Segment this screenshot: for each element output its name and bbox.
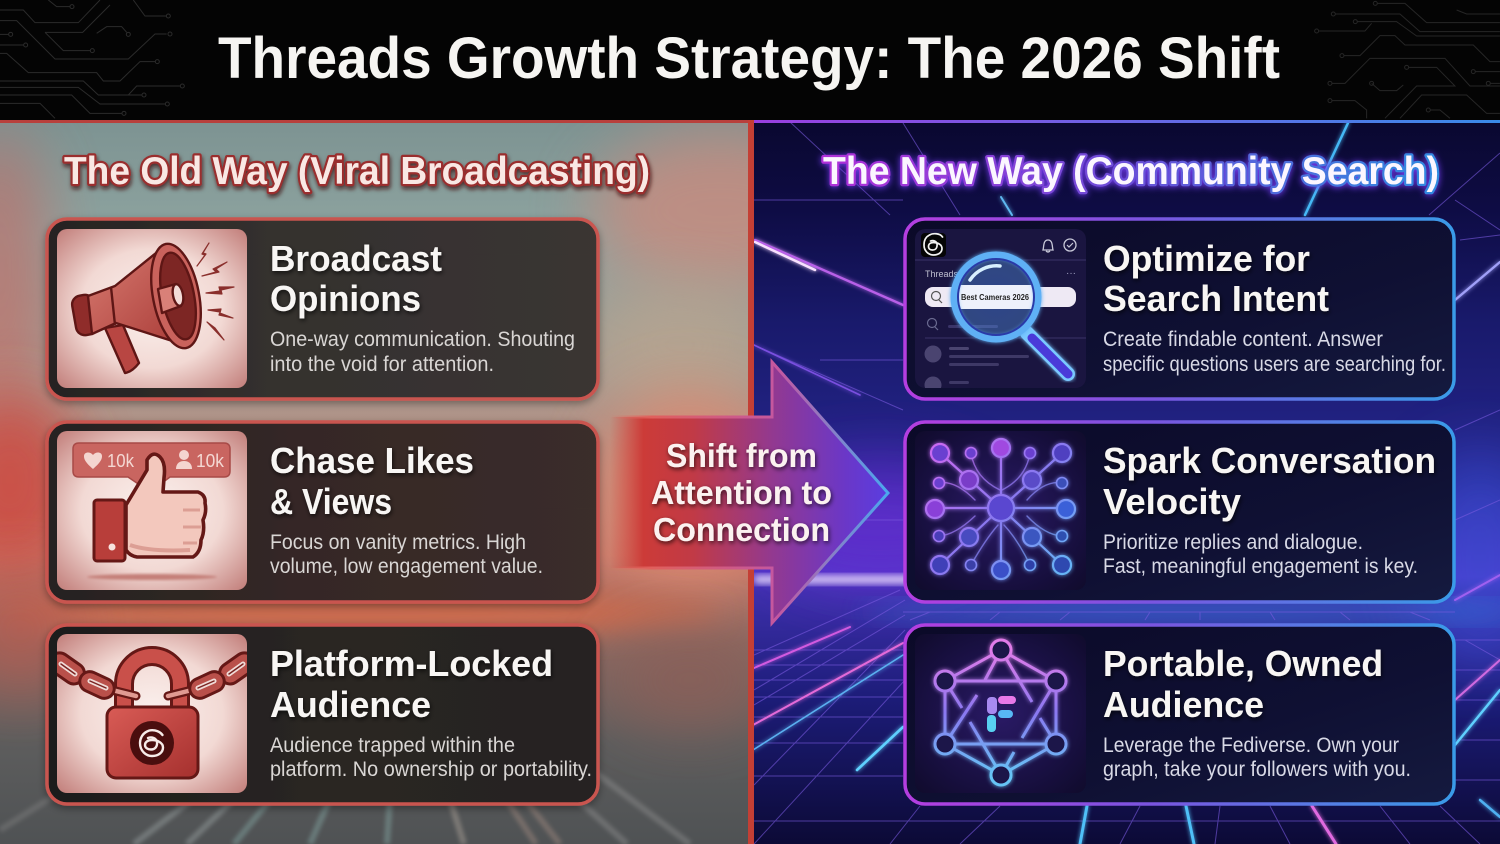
icon: thumbs up with metrics: 10k: [196, 451, 225, 471]
card description: Prioritize replies and dialogue.: [1103, 531, 1363, 554]
card description: [270, 531, 543, 578]
heading: old way: The Old Way (Viral Broadcasting): [64, 150, 650, 193]
card heading: & Views: [270, 481, 392, 522]
card heading: Platform-Locked: [270, 643, 553, 684]
icon: search interface with magnifier: ···: [1066, 268, 1076, 279]
icon: fediverse graph: [915, 634, 1086, 793]
card description: volume, low engagement value.: [270, 555, 543, 578]
header band: [0, 0, 1500, 120]
arrow label: Shift from: [666, 437, 817, 474]
card heading: Audience: [1103, 684, 1264, 725]
card: optimize for search intent: [905, 219, 1454, 399]
arrow label: [651, 437, 832, 548]
card: broadcast opinions: [47, 219, 598, 399]
card: chase likes and views: [47, 422, 598, 602]
card description: Audience trapped within the: [270, 734, 515, 757]
card description: [270, 734, 592, 781]
card heading: Chase Likes: [270, 440, 474, 481]
card heading: Spark Conversation: [1103, 440, 1436, 481]
arrow label: Attention to: [651, 474, 832, 511]
card heading: Optimize for: [1103, 238, 1310, 279]
card description: platform. No ownership or portability.: [270, 758, 592, 781]
icon: thumbs up with metrics: 10k: [107, 451, 135, 471]
divider: top accent old: [0, 120, 752, 123]
card heading: [270, 238, 442, 319]
card heading: Search Intent: [1103, 278, 1329, 319]
divider: center: [748, 120, 754, 844]
card description: into the void for attention.: [270, 353, 494, 376]
card description: One-way communication. Shouting: [270, 328, 575, 351]
card heading: Audience: [270, 684, 431, 725]
card description: Focus on vanity metrics. High: [270, 531, 526, 554]
icon: search interface with magnifier: Threads: [925, 269, 959, 279]
card heading: [270, 440, 474, 522]
icon: search interface with magnifier: [915, 229, 1086, 394]
card heading: [1103, 643, 1383, 725]
card description: [1103, 531, 1418, 578]
icon: padlock and chains: [57, 634, 247, 793]
card heading: Velocity: [1103, 481, 1241, 522]
card description: Fast, meaningful engagement is key.: [1103, 555, 1418, 578]
arrow: shift from attention to connection: [610, 362, 888, 623]
card description: Create findable content. Answer: [1103, 328, 1383, 351]
card heading: [1103, 440, 1436, 522]
card description: [1103, 328, 1446, 376]
icon: megaphone: [57, 229, 247, 388]
card heading: Opinions: [270, 278, 421, 319]
title: Threads Growth Strategy: The 2026 Shift: [218, 26, 1280, 91]
card description: [1103, 734, 1411, 781]
divider: top accent new: [752, 120, 1500, 123]
icon: search interface with magnifier: Best Cameras 2026: [961, 292, 1029, 302]
card: spark conversation velocity: [610, 362, 1454, 804]
icon: conversation network: [915, 431, 1436, 590]
card description: specific questions users are searching for.: [1103, 353, 1446, 376]
background: old way panel: [0, 123, 748, 844]
card heading: Portable, Owned: [1103, 643, 1383, 684]
card: portable owned audience: [905, 625, 1454, 804]
card: platform-locked audience: [45, 625, 598, 804]
card heading: [270, 643, 553, 725]
card description: graph, take your followers with you.: [1103, 758, 1411, 781]
background: new way panel: [753, 122, 1500, 844]
heading: new way: The New Way (Community Search): [823, 150, 1439, 193]
icon: thumbs up with metrics: [57, 431, 247, 590]
arrow label: Connection: [653, 511, 830, 548]
card heading: [1103, 238, 1329, 319]
card heading: Broadcast: [270, 238, 442, 279]
card description: Leverage the Fediverse. Own your: [1103, 734, 1399, 757]
card description: [270, 328, 575, 376]
